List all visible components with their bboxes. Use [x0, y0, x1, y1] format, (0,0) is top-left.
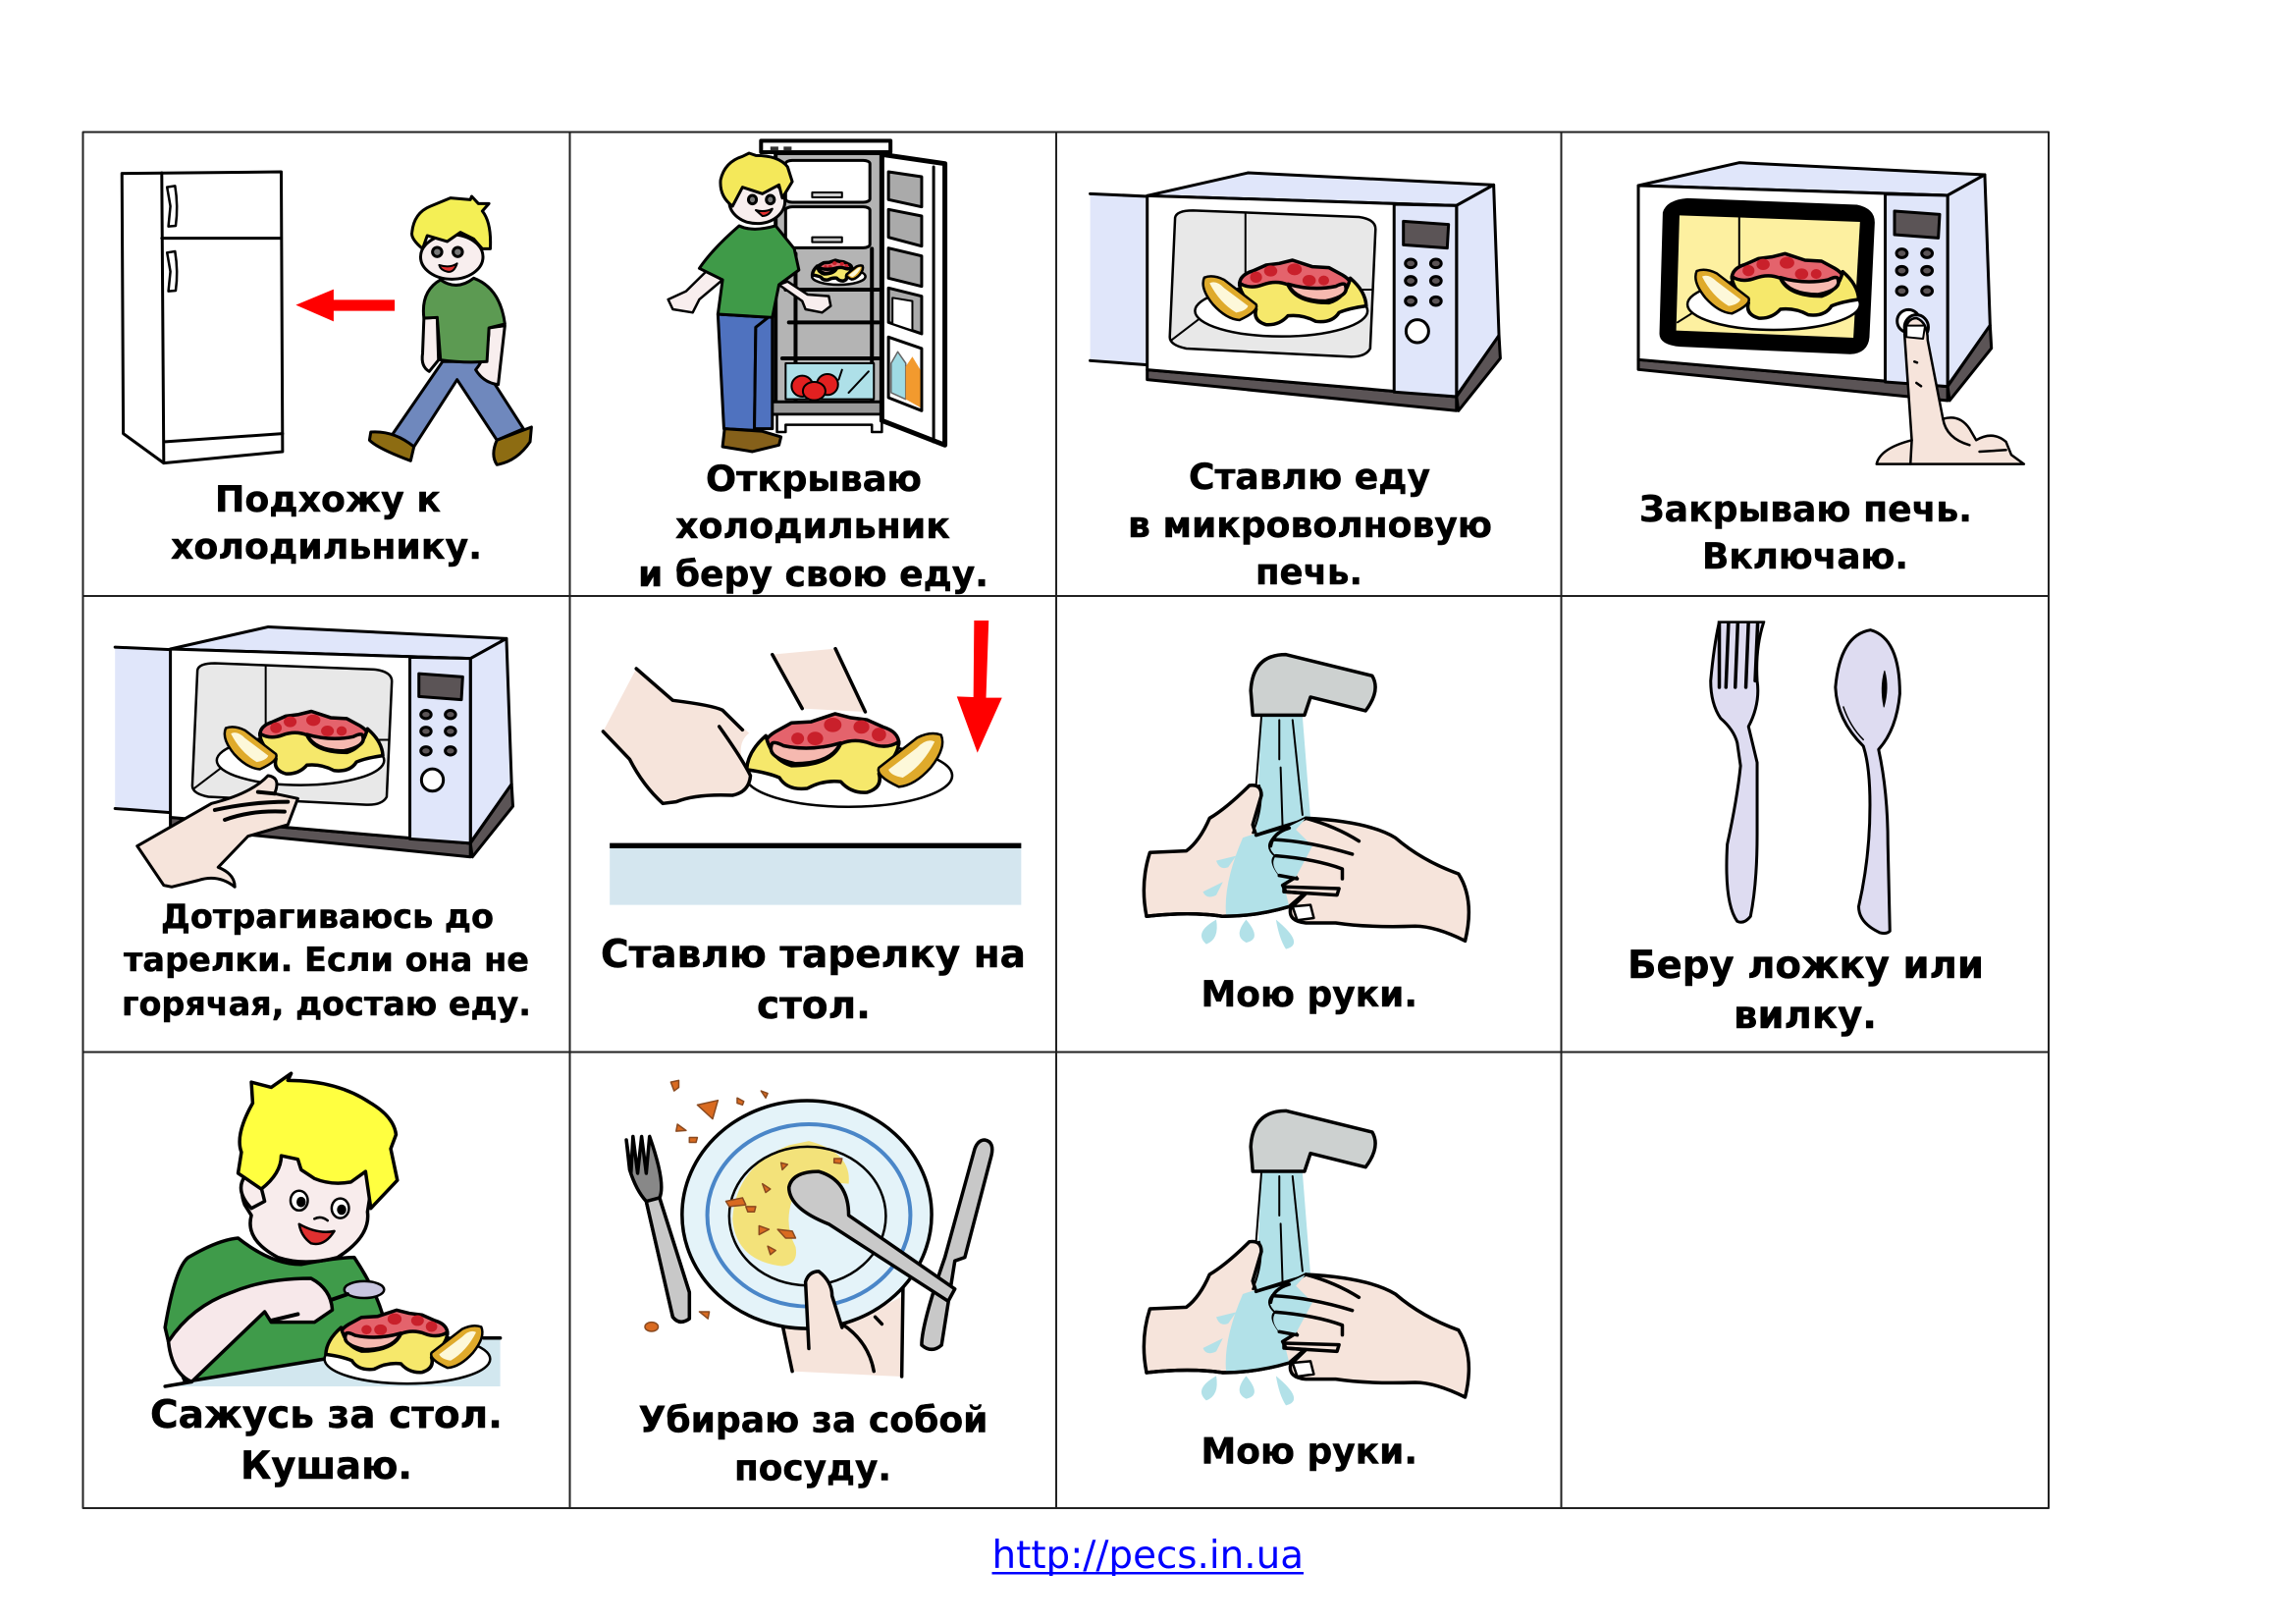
- caption: Ставлю тарелку на: [601, 932, 1026, 977]
- caption: [601, 932, 1026, 1028]
- illustration: fork and spoon: [1711, 617, 1899, 934]
- illustration: closed microwave and finger pressing button: [1638, 163, 2024, 464]
- panel: empty cell: [1561, 1053, 2049, 1508]
- caption: Беру ложку или: [1628, 943, 1984, 988]
- illustration: dirty plate, spoon, fork and knife: [626, 1080, 992, 1377]
- panel: беру ложку или вилку: [1561, 596, 2049, 1053]
- caption: [638, 458, 988, 595]
- caption: тарелки. Если она не: [124, 941, 529, 979]
- caption: вилку.: [1734, 993, 1877, 1038]
- footer link text: http://pecs.in.ua: [991, 1534, 1304, 1578]
- caption: [1128, 456, 1492, 593]
- panel: подхожу к холодильнику: [82, 132, 569, 596]
- caption: и беру свою еду.: [638, 553, 988, 595]
- illustration: boy at open fridge: [668, 140, 945, 452]
- panel: дотрагиваюсь до тарелки: [82, 596, 569, 1053]
- caption: Сажусь за стол.: [150, 1392, 503, 1437]
- caption: стол.: [757, 983, 871, 1028]
- caption: [638, 1398, 988, 1488]
- caption: посуду.: [734, 1447, 891, 1488]
- panel: мою руки (повтор): [1056, 1053, 1561, 1508]
- caption: [150, 1392, 503, 1488]
- panel: ставлю тарелку на стол: [569, 596, 1056, 1053]
- caption: Мою руки.: [1201, 1430, 1417, 1473]
- panel: мою руки: [1056, 596, 1561, 1053]
- panel: ставлю еду в микроволновую печь: [1056, 132, 1561, 596]
- caption: Дотрагиваюсь до: [161, 897, 494, 936]
- caption: [1639, 488, 1972, 577]
- caption: Закрываю печь.: [1639, 488, 1972, 530]
- caption: холодильнику.: [171, 525, 482, 568]
- caption: Открываю: [706, 458, 922, 500]
- caption: Мою руки.: [1201, 973, 1417, 1015]
- caption: [122, 897, 531, 1023]
- caption: Подхожу к: [215, 478, 441, 520]
- illustration: hand touching plate in microwave: [115, 626, 512, 887]
- caption: Убираю за собой: [638, 1398, 988, 1441]
- panel: закрываю печь, включаю: [1561, 132, 2049, 596]
- caption: холодильник: [675, 505, 950, 547]
- caption: печь.: [1255, 551, 1362, 593]
- caption: [171, 478, 482, 568]
- illustration: boy eating at table: [165, 1073, 501, 1386]
- caption: Ставлю еду: [1189, 456, 1430, 498]
- caption: в микроволновую: [1128, 504, 1492, 546]
- panel: сажусь за стол, кушаю: [82, 1053, 569, 1508]
- panel: убираю за собой посуду: [569, 1053, 1056, 1508]
- illustration: washing hands under faucet: [1144, 655, 1468, 949]
- caption: Включаю.: [1702, 535, 1908, 577]
- panel: открываю холодильник: [569, 132, 1056, 596]
- illustration: fridge, arrow and walking boy: [122, 172, 531, 464]
- illustration: hands placing plate on table with arrow: [603, 621, 1021, 905]
- caption: [1628, 943, 1984, 1038]
- caption: Кушаю.: [240, 1443, 412, 1488]
- illustration: washing hands under faucet: [1144, 1110, 1468, 1405]
- illustration: open microwave with food: [1091, 173, 1500, 410]
- caption: горячая, достаю еду.: [122, 985, 531, 1023]
